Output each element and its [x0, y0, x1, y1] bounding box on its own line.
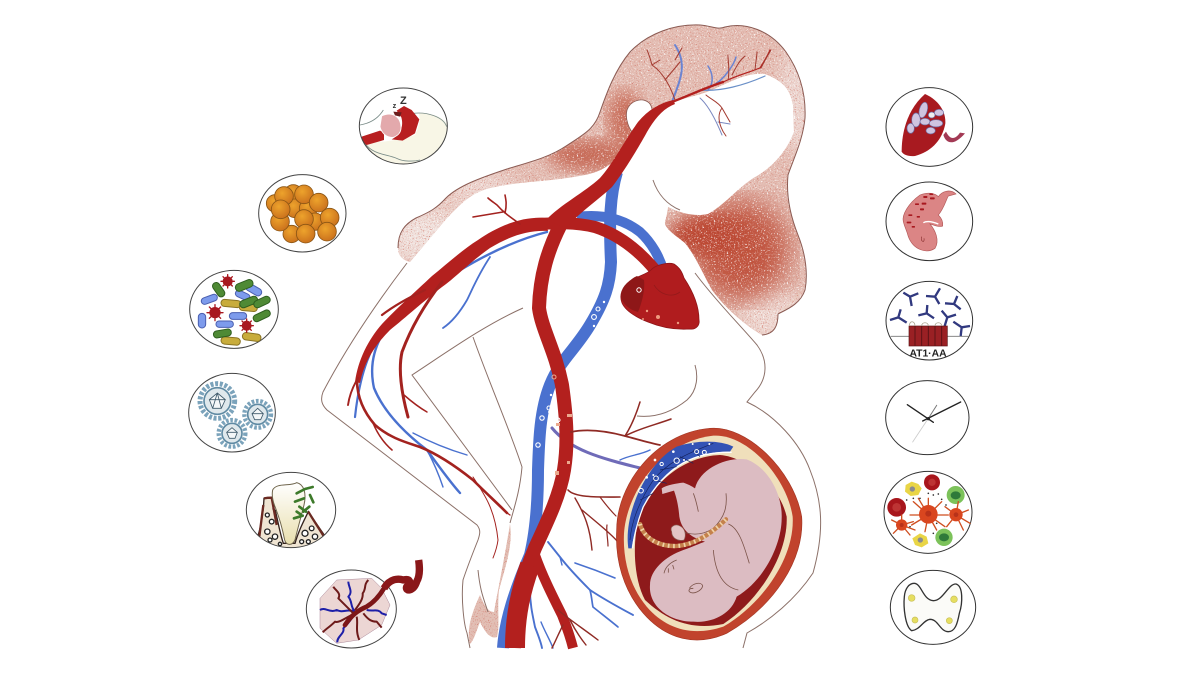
descending aorta [514, 226, 566, 648]
artery system [348, 48, 771, 648]
arm branches [348, 282, 510, 558]
figure: pregnant woman [322, 15, 822, 650]
antibodies [890, 288, 970, 336]
cytokine dots [906, 492, 947, 534]
uterine branches [552, 402, 671, 648]
umbilical cord [640, 519, 726, 546]
lower aorta widening [515, 565, 530, 648]
uterine wall [616, 428, 802, 640]
receptor [909, 326, 947, 346]
circle icon: vessel network [306, 560, 419, 648]
membrane [624, 436, 793, 631]
pillow and bedding [358, 110, 449, 167]
bone and gum [257, 498, 327, 549]
body outlines [322, 180, 821, 648]
fetal hand [671, 525, 685, 540]
green cells [947, 486, 965, 504]
hair with stippled shading [398, 25, 806, 335]
tooth [272, 483, 305, 544]
circle icon: thyroid [890, 570, 976, 644]
circle icon: sleep apnea: Z [400, 95, 407, 107]
vessel center and curled tail [345, 588, 384, 625]
heart [621, 263, 699, 329]
circle icon: liver [886, 182, 973, 261]
ear [626, 100, 652, 137]
blue capillaries [320, 582, 387, 642]
blood cells in vessels [536, 301, 605, 475]
face [380, 114, 401, 137]
uterus with fetus [616, 428, 802, 640]
head branches [647, 48, 771, 136]
amniotic cavity [635, 455, 787, 626]
circle icon: immune cells and platelets [884, 471, 972, 553]
yellow cells [905, 482, 928, 547]
circle icon: viruses [189, 373, 275, 452]
red cells [924, 474, 940, 490]
vena cava [503, 172, 617, 648]
placental vessels and cells [630, 443, 713, 540]
circle icon: bacteria [190, 270, 278, 348]
fetus contours [664, 493, 749, 593]
activated cells [892, 498, 970, 535]
mouth [393, 112, 402, 117]
hand stipple [468, 524, 511, 644]
snore letters: z [393, 101, 397, 110]
red capillaries [323, 580, 382, 640]
carotid tapered [546, 100, 675, 228]
shoulder branches [473, 195, 520, 224]
circle icon: fat cells [259, 175, 346, 252]
fetus body [650, 459, 782, 622]
neck [362, 131, 384, 145]
hair outline [398, 25, 806, 335]
circle icon: clock [886, 381, 969, 455]
arm veins [372, 232, 547, 493]
AT1-AA label: AT1·AA [909, 349, 947, 360]
head veins [672, 45, 682, 102]
plaque bacteria [294, 487, 313, 518]
hair [392, 106, 419, 141]
circle icon: periodontal tooth [246, 472, 336, 549]
circle icon: AT1-AA antibodies [886, 281, 973, 360]
right iliac branch [535, 555, 573, 648]
vein system [355, 45, 765, 648]
circle icon: sleep apnea [358, 88, 449, 167]
arm artery distal [357, 380, 507, 513]
circle icon: placenta [886, 88, 973, 166]
arm artery tapered [355, 218, 548, 383]
vein arch to heart [577, 216, 663, 270]
placenta white border [633, 452, 732, 548]
aortic arch [535, 223, 655, 270]
abdominal veins [548, 542, 633, 615]
placenta [628, 442, 733, 548]
tissue patch [320, 578, 390, 643]
infographic canvas [188, 24, 976, 650]
